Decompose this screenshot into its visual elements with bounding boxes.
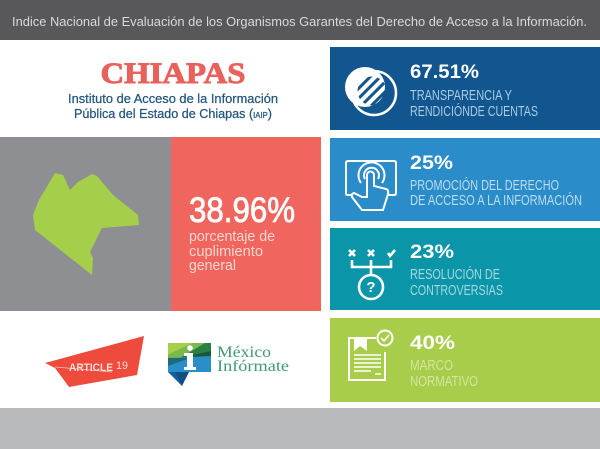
icon: document with check	[349, 330, 392, 380]
subtitle: institute name: Instituto de Acceso de la Información	[68, 91, 278, 106]
icon: decision tree	[349, 250, 395, 299]
label: CONTROVERSIAS	[410, 283, 503, 299]
score 67.51%: 67.51%	[410, 61, 479, 83]
panel: marco normativo	[330, 318, 600, 402]
label: RESOLUCIÓN DE	[410, 266, 500, 283]
logo: México Infórmate: México	[217, 344, 271, 361]
general label: general	[189, 257, 236, 274]
general label: cuplimiento	[189, 243, 263, 260]
footer bar	[0, 408, 600, 449]
subtitle: institute name	[68, 91, 278, 121]
icon: decision tree: ?	[366, 279, 376, 296]
general label: porcentaje de	[189, 228, 275, 245]
logo: Article 19: 19	[116, 360, 128, 372]
icon: Chiapas state map	[33, 173, 139, 275]
panel: promoción	[330, 138, 600, 221]
logo: México Infórmate: Infórmate	[217, 358, 289, 375]
score 25%: 25%	[410, 152, 453, 174]
panel: map of Chiapas	[0, 137, 171, 311]
label	[410, 358, 478, 390]
logo: Article 19: ARTICLE	[69, 362, 113, 374]
icon: overlapping circles	[345, 62, 399, 115]
title: Chiapas: CHIAPAS	[100, 57, 246, 90]
label: NORMATIVO	[410, 374, 478, 390]
general percentage: 38.96%	[189, 191, 295, 230]
general label	[189, 228, 275, 274]
logo: México Infórmate	[168, 343, 289, 386]
label	[410, 266, 503, 299]
label	[410, 88, 538, 120]
label: RENDICIÓNDE CUENTAS	[410, 103, 538, 120]
icon: touch screen	[346, 161, 396, 210]
label	[410, 177, 582, 209]
label: TRANSPARENCIA Y	[410, 88, 512, 104]
header bar	[0, 0, 600, 40]
panel: general compliance	[171, 137, 321, 311]
subtitle: institute name: Pública del Estado de Chiapas (IAIP)	[74, 106, 272, 121]
score 23%: 23%	[410, 241, 454, 263]
header bar: Indice Nacional de Evaluación de los Organismos Garantes del Derecho de Acceso a la Información.	[12, 15, 587, 29]
panel: transparencia	[330, 47, 600, 130]
label: MARCO	[410, 358, 453, 374]
panel: resolución	[330, 228, 600, 310]
score 40%: 40%	[410, 332, 455, 354]
logo: Article 19	[45, 336, 144, 387]
